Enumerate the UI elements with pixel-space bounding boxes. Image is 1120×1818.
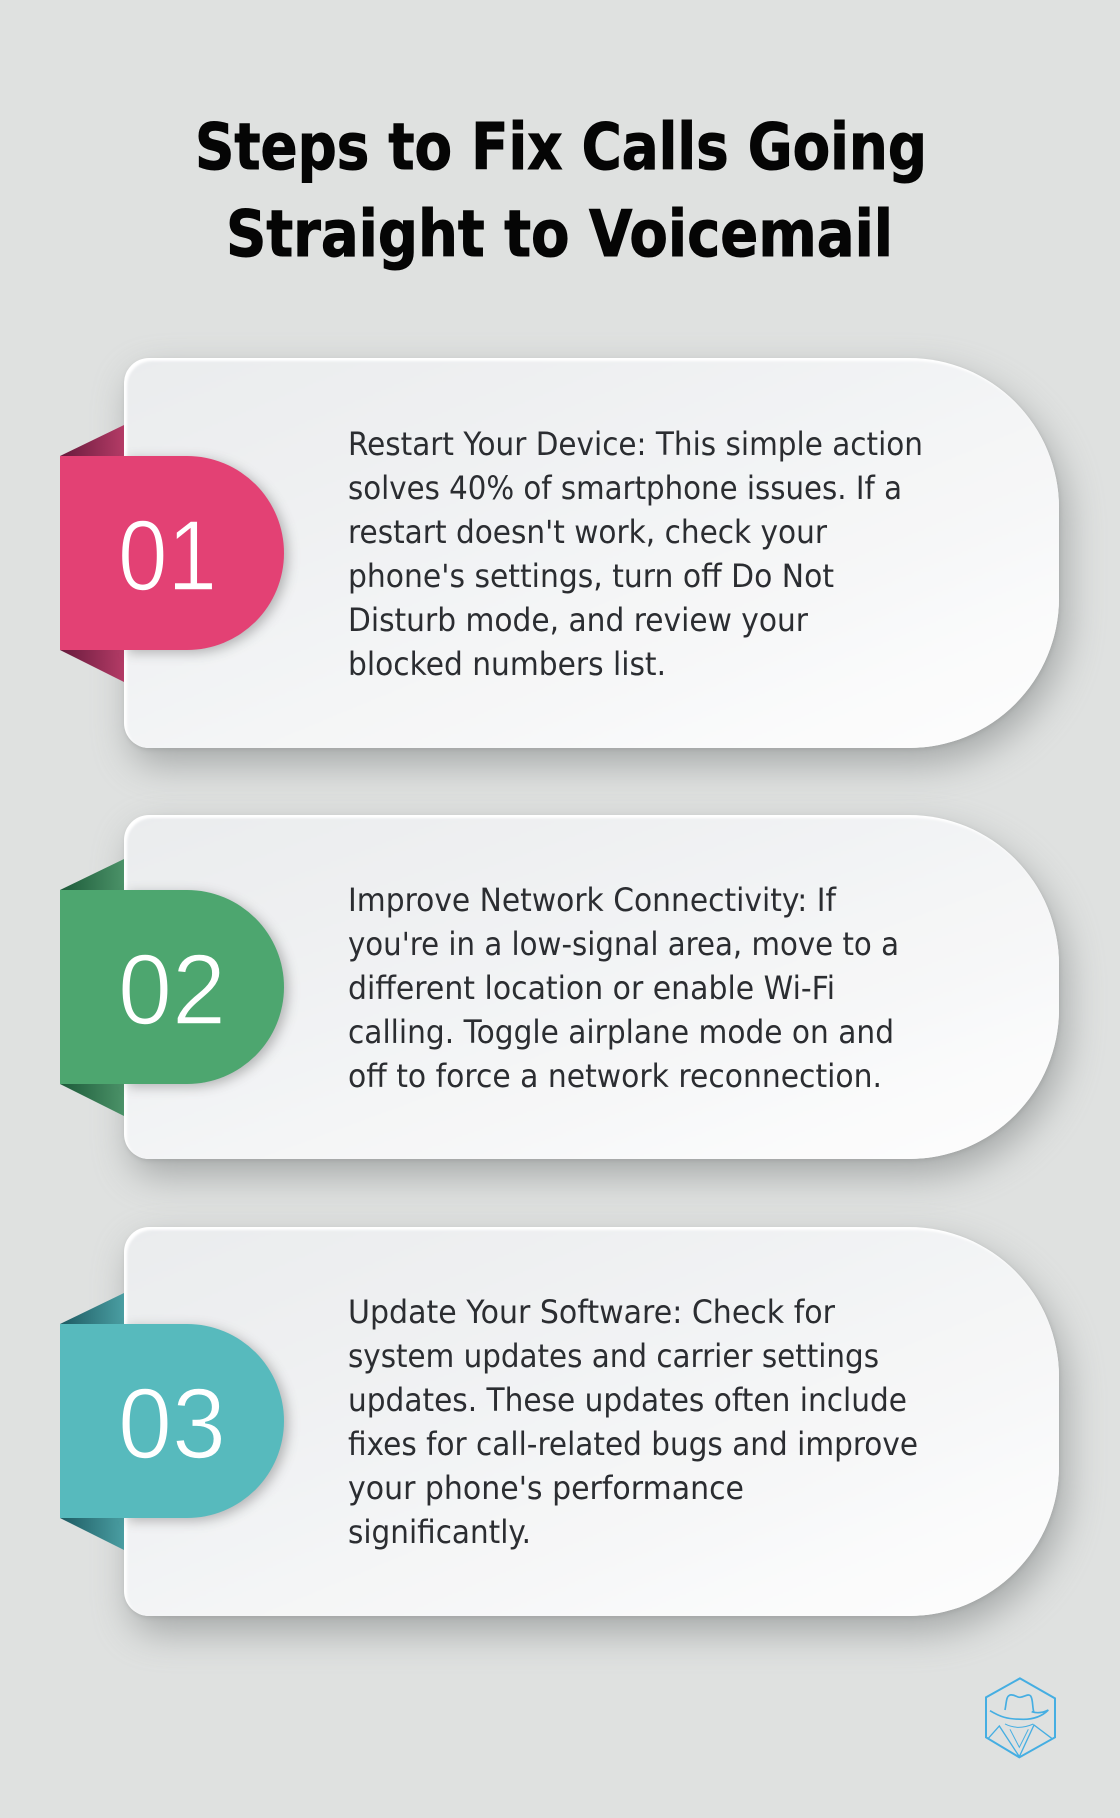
number badge 01 — [60, 456, 288, 653]
number badge 01: 01 — [118, 500, 217, 612]
step 1 text — [348, 425, 923, 683]
ribbon folds 1 — [60, 425, 124, 682]
step 1 text: Restart Your Device: This simple action — [348, 425, 923, 463]
step 1 text: restart doesn't work, check your — [348, 513, 828, 551]
panel: step 1 restart your device — [60, 358, 1066, 764]
card 3 — [124, 1227, 1066, 1632]
ribbon folds 2 — [60, 859, 124, 1116]
step 3 text: Update Your Software: Check for — [348, 1293, 836, 1331]
icon: hexagon logo with hat — [986, 1678, 1055, 1757]
step 3 text: significantly. — [348, 1513, 531, 1551]
number badge 03: 03 — [118, 1368, 226, 1480]
step 2 text — [348, 881, 899, 1095]
number badge 02: 02 — [118, 934, 226, 1046]
step 3 text: system updates and carrier settings — [348, 1337, 879, 1375]
card 1 — [124, 358, 1066, 764]
number badge 02 — [60, 890, 288, 1087]
ribbon folds 3 — [60, 1293, 124, 1550]
step 2 text: Improve Network Connectivity: If — [348, 881, 837, 919]
panel: step 3 update your software — [60, 1227, 1066, 1632]
step 3 text: updates. These updates often include — [348, 1381, 907, 1419]
number badge 03 — [60, 1324, 288, 1521]
step 2 text: you're in a low-signal area, move to a — [348, 925, 899, 963]
step 1 text: phone's settings, turn off Do Not — [348, 557, 834, 595]
step 2 text: different location or enable Wi-Fi — [348, 969, 835, 1007]
step 3 text: fixes for call-related bugs and improve — [348, 1425, 918, 1463]
step 2 text: off to force a network reconnection. — [348, 1057, 882, 1095]
step 1 text: Disturb mode, and review your — [348, 601, 809, 639]
step 3 text — [348, 1293, 918, 1551]
title — [195, 111, 927, 272]
title: Steps to Fix Calls Going — [195, 111, 927, 185]
step 1 text: solves 40% of smartphone issues. If a — [348, 469, 902, 507]
step 2 text: calling. Toggle airplane mode on and — [348, 1013, 894, 1051]
step 1 text: blocked numbers list. — [348, 645, 666, 683]
panel: step 2 improve network connectivity — [60, 815, 1066, 1175]
card 2 — [124, 815, 1066, 1175]
title: Straight to Voicemail — [226, 198, 893, 272]
step 3 text: your phone's performance — [348, 1469, 744, 1507]
